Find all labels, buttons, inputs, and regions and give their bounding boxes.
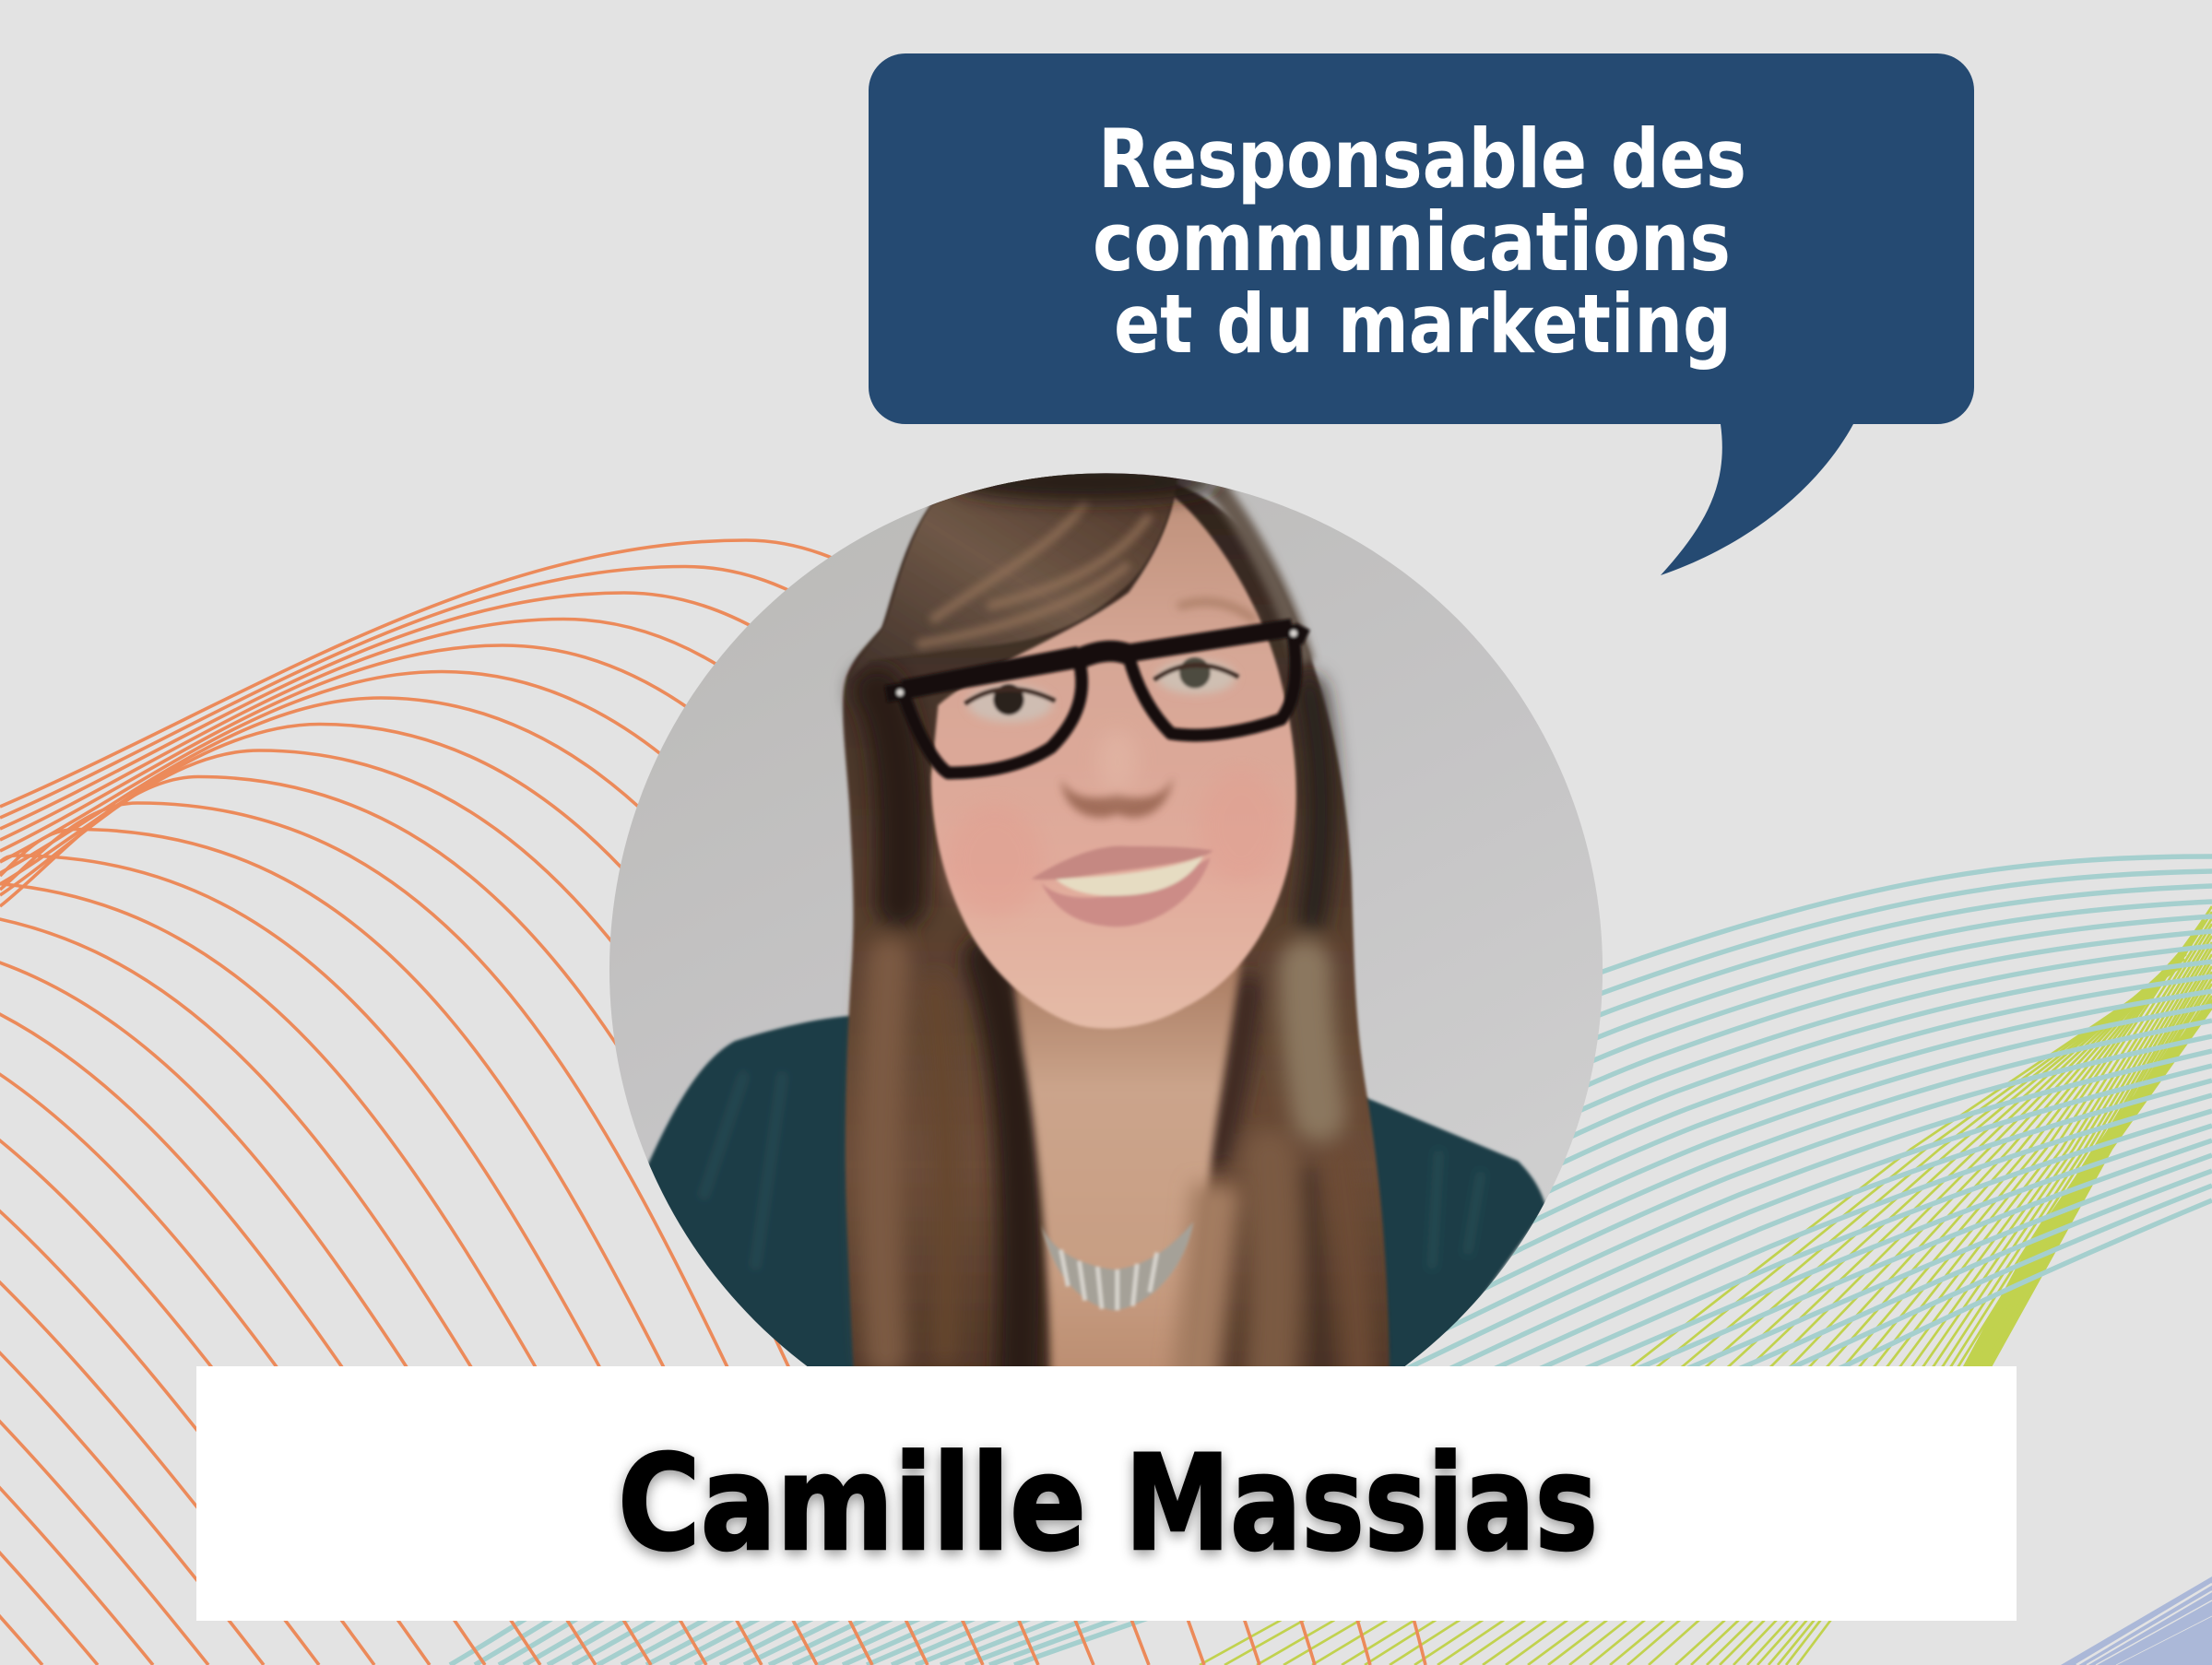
job title text — [1093, 112, 1746, 372]
neck and chest — [1013, 959, 1241, 1397]
lower hair over chest — [1193, 1185, 1216, 1397]
job title text: communications — [1093, 195, 1731, 289]
eyes — [965, 602, 1256, 722]
orange line wave — [0, 540, 1425, 1665]
name text — [618, 1426, 1598, 1580]
job title text: Responsable des — [1098, 112, 1746, 207]
right hair strand — [1216, 487, 1305, 663]
hair shadows and highlights — [878, 691, 1360, 1397]
bangs — [846, 464, 1220, 679]
portrait photo — [609, 473, 1603, 1366]
name text: Camille — [618, 1426, 1086, 1580]
wall backdrop — [609, 478, 1603, 1344]
necklace — [1041, 1222, 1193, 1310]
job title text: et du marketing — [1114, 277, 1732, 372]
glasses — [886, 628, 1307, 773]
name panel — [196, 1366, 2017, 1621]
shirt — [642, 1016, 1546, 1397]
long hair — [843, 473, 1390, 1397]
cheeks and nose — [937, 746, 1175, 906]
lips and teeth — [1031, 846, 1213, 927]
face — [931, 497, 1296, 1029]
name text: Massias — [1125, 1426, 1598, 1580]
lavender line wave — [2061, 1576, 2212, 1665]
teal line wave — [450, 856, 2212, 1665]
speech bubble — [869, 53, 1974, 575]
green line wave — [1200, 906, 2212, 1665]
